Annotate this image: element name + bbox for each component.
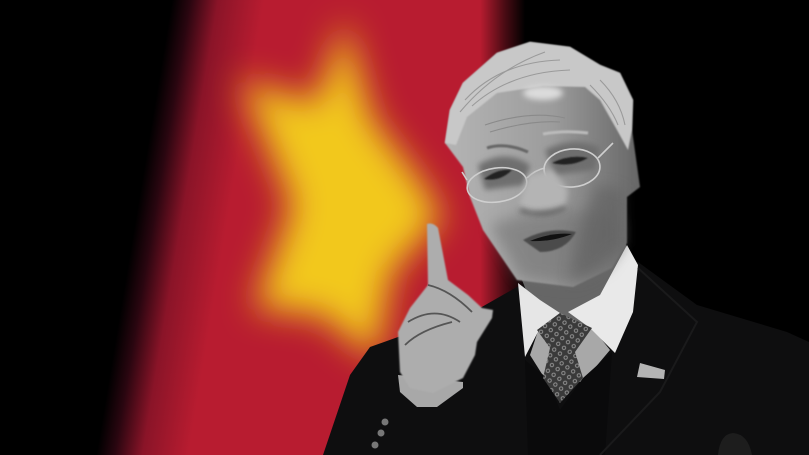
shirt — [530, 325, 610, 382]
mouth opening — [530, 234, 572, 241]
head base — [445, 42, 640, 287]
flag: red field — [0, 0, 530, 455]
brows — [487, 132, 588, 152]
nostril shadow — [520, 207, 566, 213]
cuff — [398, 375, 463, 407]
person — [323, 42, 809, 455]
jacket sleeve buttons — [372, 418, 388, 448]
forehead highlight — [523, 86, 563, 100]
tie — [537, 313, 592, 403]
hair — [445, 42, 633, 150]
neck — [518, 235, 630, 330]
nose — [519, 170, 568, 212]
hand — [398, 224, 493, 393]
shirt collar left — [518, 283, 560, 357]
suit jacket — [323, 262, 809, 455]
lower face shading — [490, 210, 622, 285]
shirt collar right — [568, 245, 638, 353]
forehead wrinkles — [485, 115, 565, 132]
lapel edge — [600, 268, 697, 455]
flag: yellow star — [240, 20, 442, 360]
eyes — [484, 157, 588, 180]
lapel pin — [637, 363, 665, 379]
sweater — [525, 352, 612, 455]
microphone — [718, 433, 752, 455]
hair strands — [460, 52, 625, 125]
right cheek shadow — [570, 185, 622, 280]
mouth — [523, 230, 576, 252]
finger lines — [405, 285, 472, 345]
glasses — [462, 143, 613, 206]
eye sockets — [478, 156, 530, 190]
